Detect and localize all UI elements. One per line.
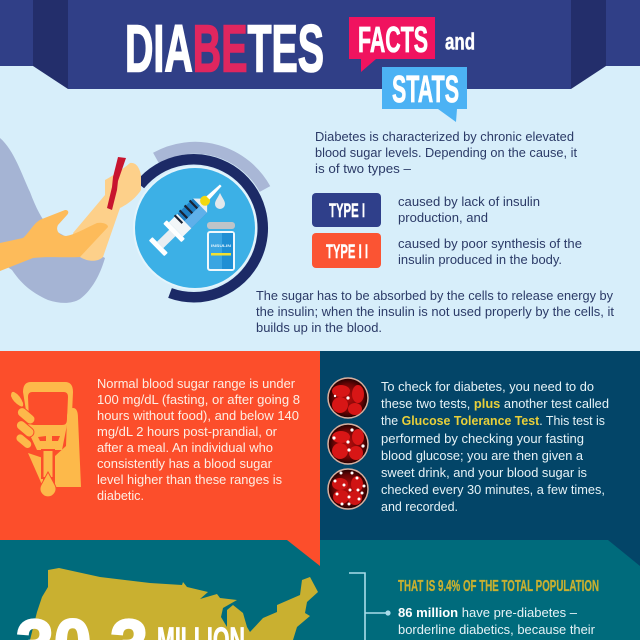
text: type I description: caused by lack of insulin <box>398 195 540 209</box>
text: normal range: diabetic. <box>97 489 144 503</box>
intro text: is of two types – <box>315 162 411 176</box>
text: sugar absorption: the insulin; when the insulin is not used properly by the cells, it <box>256 305 615 319</box>
icon: insulin vial <box>207 222 235 270</box>
title: DIABETES <box>125 12 324 86</box>
text: tests: performed by checking your fasting <box>381 432 584 446</box>
icon: blood cell few glucose <box>328 378 368 418</box>
text: normal range: level higher than these ranges is <box>97 473 282 487</box>
text: type II description: caused by poor synthesis of the <box>398 237 582 251</box>
text: tests: sweet drink, and your blood sugar is <box>381 466 587 480</box>
text: normal range <box>97 377 300 503</box>
text: normal range: consistently has a blood sugar <box>97 457 272 471</box>
text: tests: To check for diabetes, you need to do <box>381 380 594 394</box>
icon: insulin vial: INSULIN <box>211 243 231 248</box>
panel: teal statistics background <box>0 540 640 640</box>
text: normal range: hours without food), and below 140 <box>97 409 299 423</box>
badge: type II: TYPE I I <box>326 242 368 263</box>
text: pre-diabetes: borderline diabetics, because their <box>398 623 595 637</box>
icon: syringe <box>147 176 230 258</box>
icon: drop <box>215 193 225 209</box>
icon: glucose meter in hand <box>11 382 81 497</box>
text: normal range: 100 mg/dL (fasting, or after going 8 <box>97 393 300 407</box>
header banner <box>0 0 640 89</box>
speech bubble: facts <box>349 17 435 72</box>
speech bubble: facts: FACTS <box>358 19 428 60</box>
bracket connector <box>349 573 391 640</box>
intro text: blood sugar levels. Depending on the cause, it <box>315 146 578 160</box>
text: sugar absorption: The sugar has to be absorbed by the cells to release energy by <box>256 289 614 303</box>
text: normal range: Normal blood sugar range is under <box>97 377 295 391</box>
text: pre-diabetes <box>398 606 595 637</box>
text: sugar absorption <box>256 289 615 335</box>
text: type I description <box>398 195 540 225</box>
word: and: and <box>445 28 475 54</box>
illustration: arm with blood <box>0 138 141 303</box>
map: United States <box>30 568 318 640</box>
intro text: Diabetes is characterized by chronic elevated <box>315 130 574 144</box>
panel: normal blood sugar <box>0 351 320 566</box>
text: type II description <box>398 237 582 267</box>
badge: type I <box>312 193 381 227</box>
stat: people with diabetes <box>16 606 245 640</box>
text: tests: checked every 30 minutes, a few times, <box>381 483 605 497</box>
text: pre-diabetes: 86 million have pre-diabetes – <box>398 606 577 620</box>
illustration: insulin circle <box>133 148 265 297</box>
text: tests: blood glucose; you are then given a <box>381 449 583 463</box>
text: tests: the Glucose Tolerance Test. This test is <box>381 414 605 428</box>
icon: blood cell many glucose <box>328 469 368 509</box>
text: tests: these two tests, plus another test called <box>381 397 609 411</box>
text: type I description: production, and <box>398 211 488 225</box>
speech bubble: stats: STATS <box>392 69 459 111</box>
badge: type I: TYPE I <box>329 201 365 222</box>
icon: blood cell some glucose <box>328 424 368 464</box>
text: tests: and recorded. <box>381 500 458 514</box>
text: type II description: insulin produced in the body. <box>398 253 562 267</box>
text: tests <box>381 380 609 514</box>
panel: diabetes tests <box>320 351 640 566</box>
text: sugar absorption: builds up in the blood. <box>256 321 382 335</box>
badge: type II <box>312 233 381 268</box>
text: normal range: mg/dL 2 hours post-prandial, or <box>97 425 277 439</box>
text: normal range: after a meal. An individual who <box>97 441 273 455</box>
intro text <box>315 130 578 176</box>
speech bubble: stats <box>382 67 467 122</box>
